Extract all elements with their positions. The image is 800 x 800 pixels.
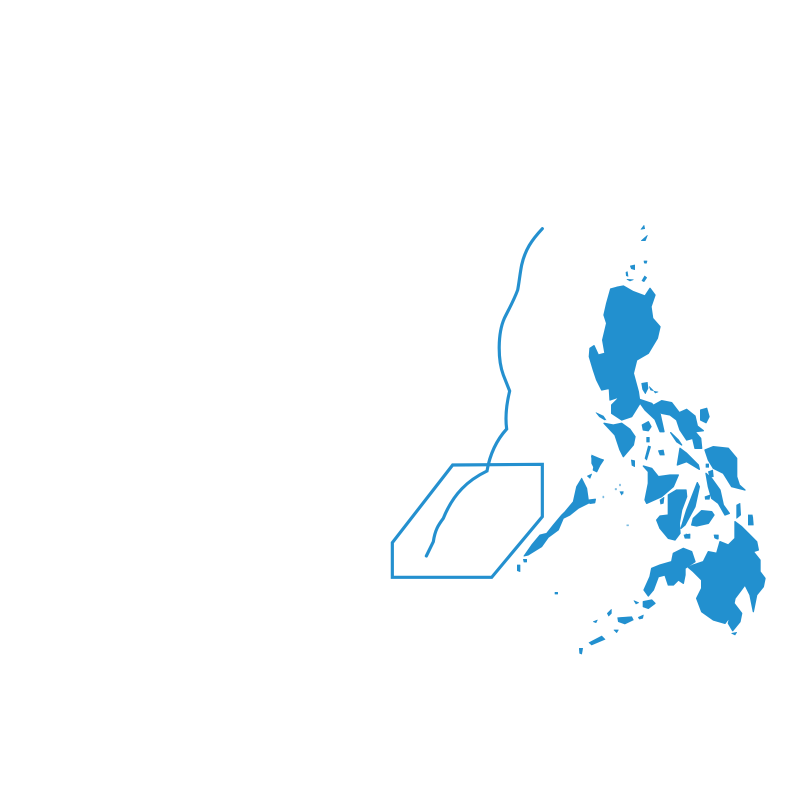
Palawan island [524, 478, 595, 556]
land masses [517, 225, 765, 654]
Panay [643, 466, 678, 503]
Mindanao group [638, 515, 765, 635]
Polillo island [642, 382, 658, 394]
Quezon strip and Bicol peninsula [637, 398, 703, 448]
small Mindanao islets [638, 515, 752, 635]
Lubang island [596, 413, 606, 420]
scattered islets [603, 484, 629, 526]
route and boundary lines [392, 229, 542, 577]
Catanduanes [701, 408, 709, 423]
Marinduque [642, 422, 651, 431]
Samar [705, 447, 745, 490]
small central islands [597, 413, 753, 539]
Leyte [706, 473, 729, 515]
northern islets [626, 225, 647, 282]
Sulu archipelago [579, 601, 639, 654]
Palawan southern islets [517, 492, 623, 594]
central Philippines islands [589, 398, 753, 540]
Cebu [681, 483, 699, 528]
Calamian islands [587, 455, 603, 478]
Bohol [692, 511, 714, 526]
Luzon island [589, 286, 660, 420]
Palawan and Sulu group [517, 455, 639, 654]
Basilan [643, 600, 655, 608]
Negros [657, 490, 687, 540]
Masbate [671, 433, 699, 469]
Mindanao island [688, 522, 765, 631]
route line [426, 229, 542, 556]
Zamboanga peninsula [644, 548, 695, 596]
boundary polygon [392, 464, 542, 577]
Busuanga group [589, 457, 603, 503]
northern Luzon and Batanes islands [589, 225, 660, 420]
Mindoro [604, 423, 635, 457]
